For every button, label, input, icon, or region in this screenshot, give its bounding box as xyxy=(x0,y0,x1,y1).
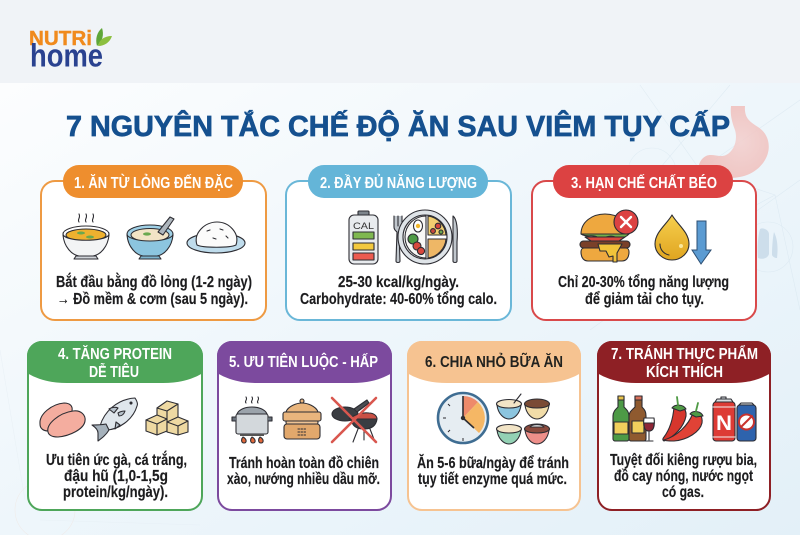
icon: chili peppers xyxy=(663,397,703,441)
text block 2: 25-30 kcal/kg/ngày. xyxy=(338,274,459,291)
icon: bamboo steamer xyxy=(283,399,321,439)
icon: porridge bowl with spoon xyxy=(127,217,174,259)
icon: down arrow xyxy=(692,221,711,264)
panel: 3 hạn chế chất béo xyxy=(532,165,756,320)
panel: 6 chia nhỏ bữa ăn xyxy=(407,341,581,510)
text block 2: Carbohydrate: 40-60% tổng calo. xyxy=(300,291,497,308)
heading 7: 7. TRÁNH THỰC PHẨM xyxy=(611,344,758,363)
text block 7: có gas. xyxy=(662,484,704,501)
top header band xyxy=(0,0,800,83)
heading pill 2 xyxy=(308,165,488,198)
panel: 5 ưu tiên luộc hấp xyxy=(217,341,392,510)
icon: chicken breast xyxy=(40,403,85,437)
icon: fish xyxy=(92,398,137,441)
panel: 7 tránh thực phẩm kích thích xyxy=(597,341,771,510)
heading 5 xyxy=(217,341,392,383)
text block 3 xyxy=(558,274,729,308)
heading 7: KÍCH THÍCH xyxy=(646,362,723,381)
icon: calorie battery: CAL xyxy=(353,221,374,232)
text block 4: Ưu tiên ức gà, cá trắng, xyxy=(46,451,187,469)
text block 7 xyxy=(610,452,757,501)
panel: 1 ăn từ lỏng đến đặc xyxy=(41,165,266,320)
icon: four small bowls xyxy=(496,394,550,444)
heading 6 xyxy=(407,341,581,383)
icon: crossed out pan and grill xyxy=(332,398,377,442)
title: 7 NGUYÊN TẮC CHẾ ĐỘ ĂN SAU VIÊM TỤY CẤP xyxy=(66,109,730,143)
text block 3: để giảm tải cho tụy. xyxy=(585,291,704,308)
heading pill 3: 3. HẠN CHẾ CHẤT BÉO xyxy=(571,173,717,192)
text block 1: Bắt đầu bằng đồ lỏng (1-2 ngày) xyxy=(56,273,252,291)
text block 1 xyxy=(56,273,252,308)
heading pill 1: 1. ĂN TỪ LỎNG ĐẾN ĐẶC xyxy=(74,173,233,192)
text block 4: protein/kg/ngày). xyxy=(63,484,168,501)
text block 6 xyxy=(417,455,569,488)
text block 7: đồ cay nóng, nước ngọt xyxy=(614,468,753,485)
icon: calorie battery xyxy=(349,211,378,264)
text block 5: Tránh hoàn toàn đồ chiên xyxy=(229,455,379,472)
text block 2 xyxy=(300,274,497,308)
text block 6: tụy tiết enzyme quá mức. xyxy=(418,471,567,488)
heading 4 xyxy=(27,341,203,383)
text block 7: Tuyệt đối kiêng rượu bia, xyxy=(610,452,757,469)
heading pill 3 xyxy=(553,165,733,198)
heading 6: 6. CHIA NHỎ BỮA ĂN xyxy=(425,351,563,371)
text block 5 xyxy=(227,455,380,488)
logo: Nutrihome: NUTRi xyxy=(29,27,92,50)
icon: steaming pot xyxy=(232,397,272,443)
icon: clock xyxy=(438,393,488,443)
logo: Nutrihome: home xyxy=(30,38,103,74)
icon: tofu cubes xyxy=(146,401,188,435)
icon: oil drop xyxy=(655,215,689,260)
heading 4: 4. TĂNG PROTEIN xyxy=(58,344,172,363)
icon: soup bowl with steam xyxy=(63,214,109,259)
text block 5: xào, nướng nhiều dầu mỡ. xyxy=(227,471,380,488)
icon: burger with cross xyxy=(580,210,638,262)
heading pill 2: 2. ĐẦY ĐỦ NĂNG LƯỢNG xyxy=(320,173,477,192)
icon: fork plate and knife xyxy=(394,210,457,264)
text block 6: Ăn 5-6 bữa/ngày để tránh xyxy=(417,455,569,472)
icon: soda cans with prohibition: N xyxy=(716,412,732,435)
panel: 4 tăng protein dễ tiêu xyxy=(27,341,203,510)
heading 5: 5. ƯU TIÊN LUỘC - HẤP xyxy=(229,352,378,371)
text block 1: → Đồ mềm & cơm (sau 5 ngày). xyxy=(57,291,248,308)
text block 4 xyxy=(46,451,187,501)
icon: soda cans with prohibition xyxy=(713,397,756,441)
heading 4: DỄ TIÊU xyxy=(89,362,139,381)
heading 7 xyxy=(597,341,771,383)
icon: rice on plate xyxy=(187,222,245,253)
heading pill 1 xyxy=(63,165,243,198)
text block 4: đậu hũ (1,0-1,5g xyxy=(64,468,168,485)
icon: alcohol bottles and wine glass xyxy=(613,396,654,441)
text block 3: Chỉ 20-30% tổng năng lượng xyxy=(558,274,729,291)
panel: 2 đầy đủ năng lượng xyxy=(286,165,511,320)
